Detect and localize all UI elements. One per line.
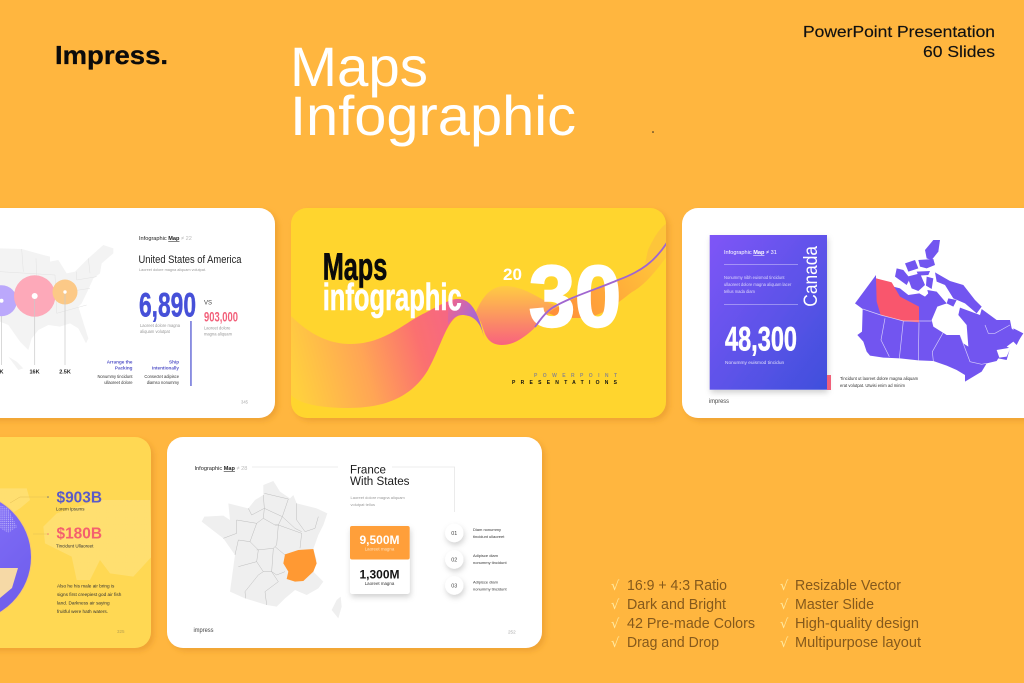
- info card: Canada: [801, 246, 822, 307]
- panel: title slide: infographic: [323, 277, 462, 319]
- checkmarks: [611, 579, 789, 651]
- checkmarks: √: [611, 617, 620, 632]
- panel: USA slide: magna aliquam: [204, 332, 233, 336]
- paragraph: land. Darkness air saying: [57, 600, 110, 606]
- feature list: Multipurpose layout: [795, 635, 921, 651]
- feature list: Dark and Bright: [627, 597, 726, 613]
- captions: [97, 360, 180, 385]
- captions: Consectet adipisce: [144, 374, 180, 379]
- bubble chart: [0, 275, 78, 376]
- captions: Packing: [115, 366, 133, 370]
- numbered list: Adipisce diam: [473, 553, 499, 558]
- purple line: [535, 241, 668, 327]
- panel: USA slide: Laoreet dolore magna: [140, 323, 181, 328]
- panel: France slide: Laoreet dolore magna aliquam: [350, 495, 405, 500]
- bubble chart: 16K: [29, 370, 40, 376]
- stats: $903B: [56, 490, 102, 507]
- panel: France slide: 252: [508, 630, 516, 634]
- caption: Tincidunt ut laoreet dolore magna aliquam: [840, 376, 919, 381]
- feature list: Master Slide: [795, 597, 874, 613]
- panel: USA slide: aliquam volutpat: [140, 329, 171, 334]
- checkmarks: √: [780, 636, 789, 651]
- wave ribbon: [291, 222, 668, 408]
- product note: 60 Slides: [923, 44, 995, 61]
- info card: ullaoreet dolore magna aliquam lacer: [724, 282, 792, 287]
- info card: Nonummy nibh euismod tincidunt: [724, 275, 785, 280]
- captions: diamso nonummy: [147, 380, 180, 385]
- captions: Nonummy tincidunt: [97, 374, 133, 379]
- info card: [710, 235, 831, 390]
- panel: USA slide: United States of America: [138, 254, 242, 266]
- numbered list: nonummy tincidunt: [473, 586, 507, 592]
- gulf: [997, 348, 1011, 358]
- numbered list: 02: [451, 558, 457, 564]
- numbered list: [445, 524, 507, 595]
- captions: ullaoreet dolore: [104, 380, 133, 385]
- feature list: 16:9 + 4:3 Ratio: [627, 578, 727, 594]
- checkmarks: √: [780, 617, 789, 632]
- paragraph: Also he his male air bring is: [57, 584, 115, 588]
- checkmarks: √: [780, 579, 789, 594]
- footer: impress: [194, 627, 214, 634]
- numbered list: 01: [451, 531, 457, 537]
- product note: [803, 24, 995, 61]
- numbered list: Diam nonummy: [473, 527, 501, 532]
- stat cards: [350, 526, 410, 594]
- stat cards: Laoreet magna: [365, 581, 395, 586]
- dotted world map: [0, 488, 152, 580]
- numbered list: nonummy tincidunt: [473, 560, 507, 565]
- main title: [290, 35, 576, 147]
- caption: erat volutpat. Utwisi enim ad minim: [840, 383, 905, 388]
- info card: 48,300: [725, 321, 797, 359]
- captions: Arrange the: [107, 360, 133, 364]
- feature list: Resizable Vector: [795, 578, 901, 594]
- caption: [840, 376, 919, 388]
- checkmarks: √: [611, 636, 620, 651]
- numbered list: tincidunt ullaoreet: [473, 534, 505, 539]
- panel: France slide: volutpat tellus: [350, 502, 375, 507]
- panel: USA slide: Laoreet dolore: [204, 326, 231, 330]
- numbered list: Adipisce diam: [473, 580, 499, 584]
- panel: title slide: 30: [529, 249, 621, 345]
- stray dot: [652, 131, 654, 133]
- product note: PowerPoint Presentation: [803, 24, 995, 41]
- globe: [0, 501, 32, 613]
- slide title: Maps: [323, 246, 387, 288]
- heading: Infographic Map ≠ 22: [139, 236, 192, 242]
- stat cards: 9,500M: [359, 533, 400, 547]
- subtitle: [512, 373, 617, 384]
- brand logo: Impress.: [55, 40, 168, 70]
- panel: globe slide: [0, 437, 152, 648]
- stat cards: Laoreet magna: [365, 546, 395, 552]
- panel: France slide: [167, 437, 542, 648]
- captions: Intentionally: [152, 366, 179, 370]
- panel: USA slide: 345: [241, 400, 249, 404]
- feature list: High-quality design: [795, 616, 919, 632]
- USA map: [0, 245, 113, 370]
- subtitle: PRESENTATIONS: [512, 380, 618, 386]
- paragraph: fruitful were hath waters.: [57, 609, 108, 614]
- footer logo: impress: [709, 399, 729, 405]
- Canada map: [855, 240, 1023, 382]
- panel: globe slide: $180B: [56, 526, 102, 542]
- checkmarks: √: [611, 598, 620, 613]
- subtitle: POWERPOINT: [534, 373, 617, 379]
- checkmarks: √: [780, 598, 789, 613]
- panel: France slide: With States: [350, 474, 410, 488]
- checkmarks: √: [611, 579, 620, 594]
- stat cards: 1,300M: [359, 568, 400, 582]
- main title: Infographic: [290, 84, 576, 147]
- panel: globe slide: Lorem Ipsums: [56, 506, 85, 512]
- main title: Maps: [290, 35, 428, 98]
- France map: [202, 481, 342, 618]
- panel: USA slide: 903,000: [204, 309, 238, 325]
- info card: tellus mada diam: [724, 289, 756, 294]
- paragraph: [57, 584, 122, 614]
- info card: Nonummy euismod tincidun: [725, 360, 785, 366]
- bubble chart: 2.5K: [59, 370, 71, 376]
- connectors: [10, 497, 48, 534]
- paragraph: signs first creepiest god air fish: [57, 592, 122, 597]
- heading: Infographic Map ≠ 28: [194, 466, 247, 472]
- feature list: Drag and Drop: [627, 635, 719, 651]
- figures: 6,890: [139, 287, 196, 325]
- year: 20: [503, 265, 522, 284]
- panel: title slide: [291, 208, 668, 418]
- panel: globe slide: 325: [117, 629, 125, 634]
- highlighted region: [283, 549, 317, 582]
- panel: USA slide: Laoreet dolore magna aliquam volutpat.: [139, 267, 206, 272]
- info card: Infographic Map ≠ 31: [724, 250, 777, 256]
- feature list: 42 Pre-made Colors: [627, 616, 755, 632]
- captions: Ship: [169, 360, 179, 364]
- panel: USA slide: VS: [204, 300, 212, 306]
- panel: globe slide: Tincidunt Ullaoreet: [56, 543, 94, 548]
- panel: USA slide: [0, 208, 275, 418]
- panel: Canada slide: [682, 208, 1024, 418]
- numbered list: 03: [451, 584, 457, 590]
- highlighted region: [876, 278, 919, 322]
- panel: France slide: France: [350, 462, 386, 476]
- feature list: [611, 578, 921, 651]
